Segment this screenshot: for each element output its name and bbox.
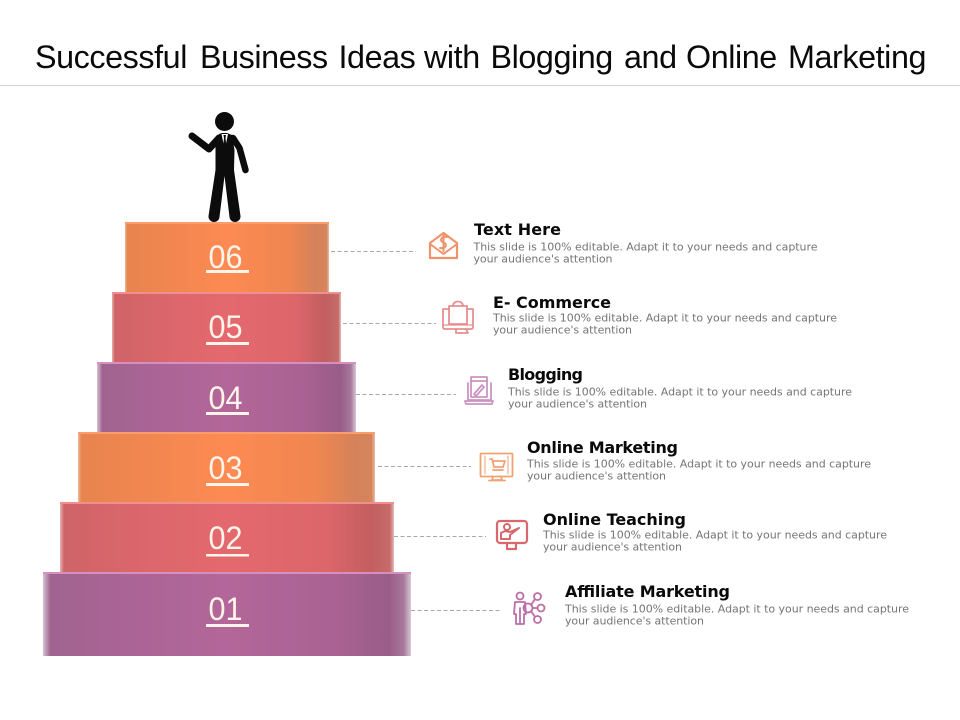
text: Online Teaching [542, 510, 887, 554]
tier 06 [125, 222, 329, 292]
tier 05 [112, 292, 341, 362]
title: with [423, 39, 480, 75]
title: Successful [35, 39, 187, 75]
number 03: 03 [208, 450, 242, 486]
text: E- Commerce: This slide is 100% editable. Adapt it to your needs and capture [492, 312, 837, 324]
tier 01 [43, 572, 411, 656]
text: Blogging [507, 365, 852, 410]
text: Text Here: Text Here [474, 220, 561, 239]
title: Ideas [338, 39, 415, 75]
number 06: 06 [208, 239, 242, 275]
icon: blogging laptop and pencil [465, 377, 493, 404]
text: Text Here [472, 220, 818, 266]
text: Online Teaching: Online Teaching [543, 510, 686, 529]
title: and [624, 39, 677, 75]
text: Online Marketing: This slide is 100% editable. Adapt it to your needs and capture [526, 458, 871, 470]
title: Blogging [490, 39, 613, 75]
text: E- Commerce [492, 293, 837, 336]
text: Blogging: your audience's attention [508, 398, 647, 410]
text: Blogging: This slide is 100% editable. Adapt it to your needs and capture [507, 386, 852, 398]
icon: open envelope with dollar [430, 233, 457, 258]
tier 04 [97, 362, 356, 432]
text: Online Teaching: your audience's attention [543, 540, 682, 554]
text: Text Here: This slide is 100% editable. Adapt it to your needs and capture [472, 240, 818, 254]
number 02: 02 [208, 520, 242, 556]
text: Affiliate Marketing [564, 582, 909, 628]
title: Online [686, 39, 777, 75]
icon: affiliate network person [514, 592, 544, 624]
title: Business [200, 39, 328, 75]
text: Affiliate Marketing: This slide is 100% editable. Adapt it to your needs and capture [564, 602, 909, 616]
text: Online Teaching: This slide is 100% editable. Adapt it to your needs and capture [542, 528, 887, 542]
tier 02 [60, 502, 394, 572]
text: Online Marketing: Online Marketing [527, 438, 678, 457]
icon: monitor with shopping cart [480, 454, 512, 480]
tier 03 [78, 432, 375, 502]
icon: standing businessman [192, 112, 246, 222]
number 01: 01 [208, 591, 242, 627]
title: Marketing [788, 39, 926, 75]
number 05: 05 [208, 309, 242, 345]
text: Blogging: Blogging [508, 365, 583, 384]
text: Online Marketing: your audience's attention [527, 470, 666, 482]
icon: e-commerce shopping bag on monitor [443, 302, 473, 333]
text: E- Commerce: your audience's attention [493, 324, 632, 336]
text: Affiliate Marketing: your audience's attention [565, 614, 704, 628]
text: Text Here: your audience's attention [474, 252, 613, 266]
text: Online Marketing [526, 438, 871, 482]
icon: online teaching monitor [497, 521, 527, 549]
number 04: 04 [208, 380, 242, 416]
text: Affiliate Marketing: Affiliate Marketing [565, 582, 730, 601]
text: E- Commerce: E- Commerce [493, 293, 611, 312]
